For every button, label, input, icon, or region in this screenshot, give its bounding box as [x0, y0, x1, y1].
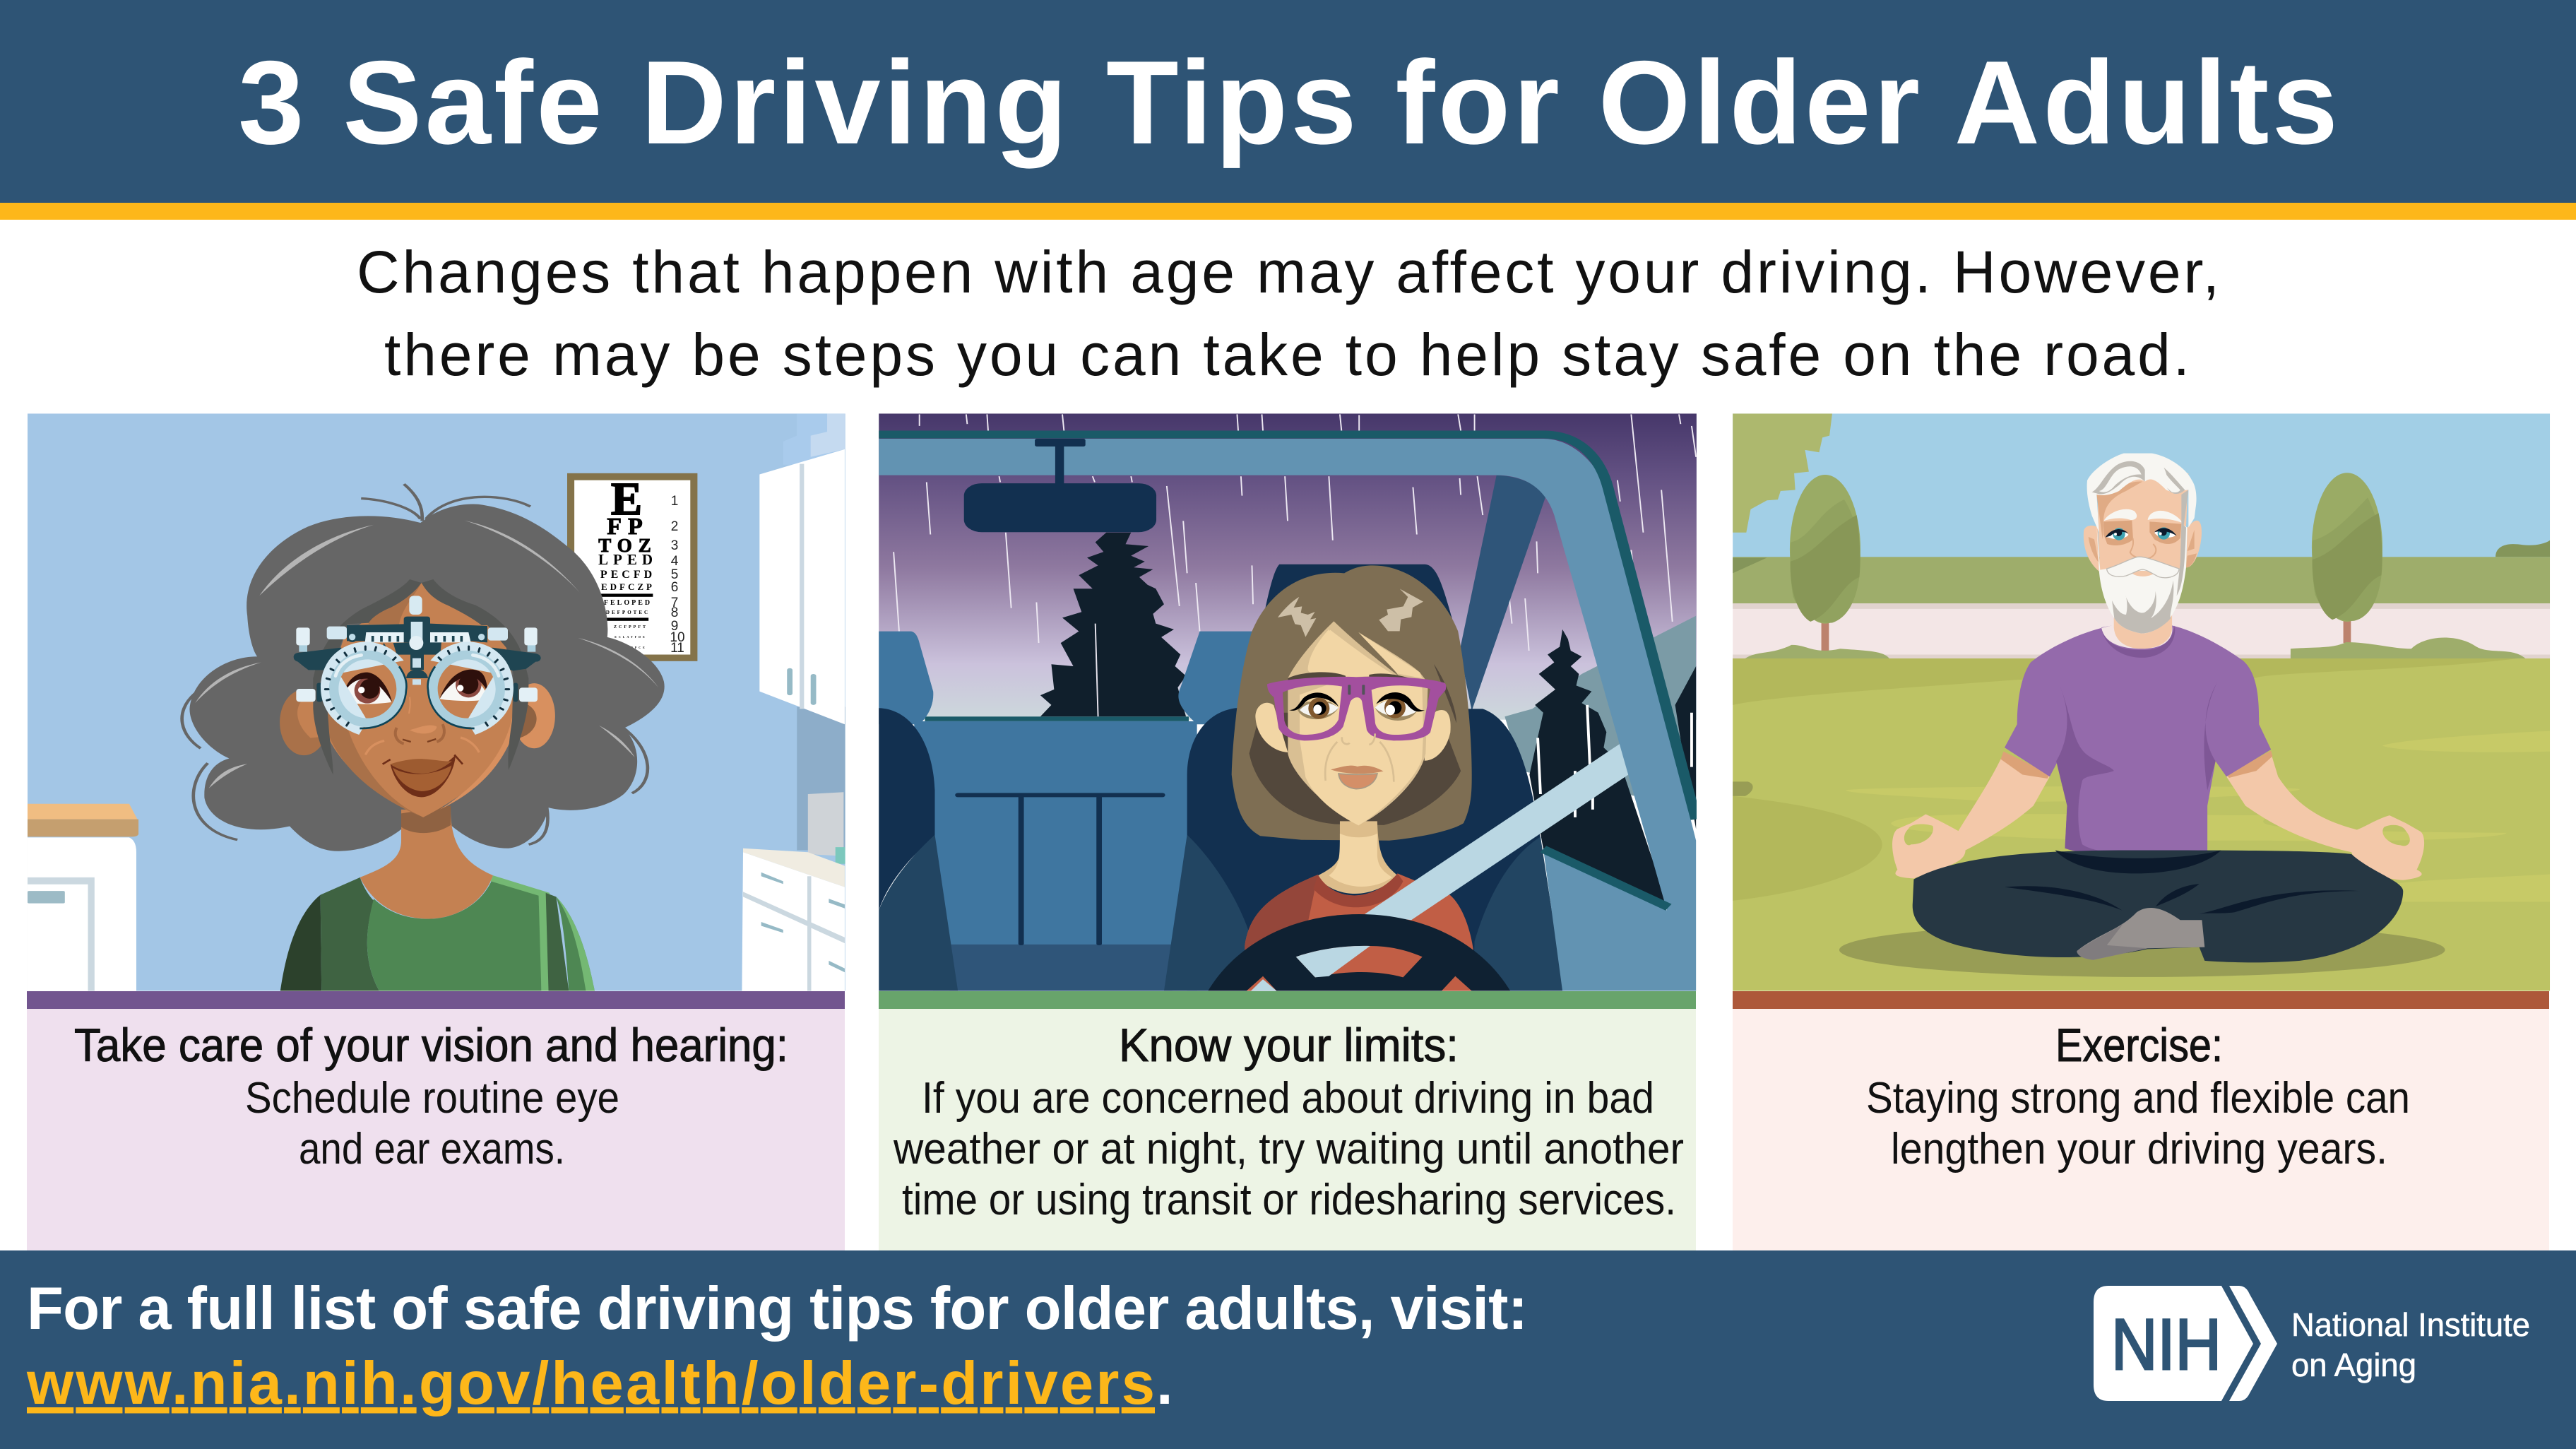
panel: limits text: If you are concerned about driving in bad	[922, 1074, 1654, 1123]
panel: exercise text: lengthen your driving years.	[1891, 1125, 2387, 1173]
lens ring right	[428, 641, 514, 735]
eye right	[2154, 527, 2177, 540]
face	[1288, 621, 1428, 825]
eyebrows	[1288, 672, 1411, 682]
left cabinet	[28, 804, 138, 991]
panel: vision text	[27, 1009, 845, 1250]
footer band	[0, 1250, 2576, 1449]
eye chart letters: ZCFPPFT	[614, 625, 648, 629]
eye chart numbers: 4	[671, 554, 679, 569]
hair	[189, 504, 665, 851]
hair highlights	[1278, 589, 1423, 637]
ears	[1255, 703, 1451, 761]
eye chart letters: PECFD	[600, 569, 655, 581]
forehead	[369, 583, 482, 625]
logo: NIH: NIH	[2111, 1304, 2221, 1385]
eye right	[440, 670, 488, 701]
hair	[1232, 565, 1472, 841]
icon: wall cabinet	[759, 449, 845, 724]
ears	[2084, 521, 2202, 572]
panel: vision text: and ear exams.	[299, 1125, 565, 1173]
a-pillar	[1460, 475, 1546, 711]
eye chart numbers: 3	[671, 538, 678, 553]
face	[2096, 473, 2188, 577]
footer link: .	[1156, 1350, 1173, 1417]
hedge band	[1733, 557, 2550, 604]
rear window edge	[925, 716, 1189, 721]
nose	[365, 697, 479, 755]
panel: exercise text: Staying strong and flexible can	[1866, 1074, 2410, 1123]
corner foliage	[1733, 413, 1832, 533]
header banner	[0, 0, 2576, 220]
shirt	[280, 875, 595, 991]
eye left	[2106, 528, 2128, 540]
logo: institute name: National Institute	[2291, 1306, 2530, 1343]
eye chart numbers: 6	[671, 580, 678, 595]
moustache	[2107, 557, 2179, 578]
pants	[1913, 851, 2403, 962]
eye right	[1375, 692, 1425, 721]
eye chart numbers: 1	[671, 494, 678, 509]
icon: trial lens frame	[294, 596, 541, 735]
panel: vision illustration	[28, 413, 845, 991]
eye chart numbers: 11	[670, 641, 684, 656]
intro text	[357, 239, 2219, 388]
logo: institute name	[2291, 1306, 2530, 1383]
logo: institute name: on Aging	[2291, 1347, 2416, 1383]
panel: vision text: Take care of your vision and hearing:	[74, 1019, 788, 1071]
beard	[2096, 525, 2188, 634]
nose	[1325, 733, 1394, 782]
eye chart numbers: 2	[671, 519, 678, 534]
rain	[894, 414, 1696, 651]
logo: NIH	[2094, 1286, 2277, 1401]
panel: vision text: Schedule routine eye	[245, 1074, 619, 1123]
panel: exercise text: Exercise:	[2055, 1019, 2223, 1071]
eye chart letters: FP	[607, 514, 649, 540]
lens ring left	[321, 641, 406, 735]
grass	[1733, 658, 2550, 991]
intro text: Changes that happen with age may affect your driving. However,	[357, 239, 2219, 305]
eye chart numbers: 10	[670, 630, 685, 645]
eye chart numbers: 8	[671, 605, 678, 620]
color band: vision	[27, 991, 845, 1009]
grass light patches	[1846, 731, 2550, 901]
panel: exercise illustration	[1733, 413, 2550, 991]
neck	[360, 805, 493, 919]
eye chart letters: LFTODPCE	[615, 646, 647, 649]
eye chart letters: DEFPOTEC	[606, 610, 650, 615]
sock	[2077, 908, 2204, 960]
panel: limits illustration	[879, 413, 1697, 991]
rear tree	[1040, 533, 1186, 716]
eye chart letters: E	[611, 473, 642, 525]
hair strands	[182, 484, 648, 844]
footer call to action: For a full list of safe driving tips for older adults, visit:	[27, 1275, 1528, 1342]
icon: eye chart frame	[567, 473, 697, 661]
lips	[1331, 766, 1384, 789]
face	[319, 583, 519, 817]
eye left	[344, 673, 392, 704]
panel: limits text	[879, 1009, 1696, 1250]
panel: limits text: time or using transit or ridesharing services.	[902, 1176, 1676, 1224]
lip	[2132, 571, 2154, 576]
neck	[1317, 821, 1398, 894]
shirt	[1245, 873, 1474, 991]
eye chart numbers	[671, 496, 684, 652]
color band: limits	[879, 991, 1696, 1009]
driver seat	[1164, 564, 1564, 991]
right ear	[520, 683, 555, 749]
window frame	[879, 439, 1696, 991]
hair shadow	[313, 579, 528, 775]
neck	[2114, 608, 2172, 649]
eye chart letters: ECLATFDE	[615, 635, 647, 639]
eye chart numbers: 5	[671, 567, 678, 582]
eyebrows	[2103, 509, 2182, 523]
tree left	[1790, 475, 1860, 653]
nose	[2130, 538, 2156, 559]
tree right	[2312, 473, 2382, 643]
panel: exercise text	[1733, 1009, 2549, 1250]
right counter	[742, 792, 845, 991]
eye chart numbers: 9	[671, 619, 678, 634]
eye chart numbers: 7	[671, 596, 678, 610]
mountain	[1504, 616, 1696, 810]
panel: limits text: weather or at night, try waiting until another	[893, 1125, 1684, 1173]
woman's face details	[294, 579, 541, 797]
icon: purple glasses	[1267, 677, 1446, 740]
intro text: there may be steps you can take to help stay safe on the road.	[384, 321, 2190, 388]
driver's face	[1250, 589, 1456, 825]
left ear	[280, 691, 321, 756]
arms	[1892, 753, 2424, 880]
seat belt	[1365, 742, 1631, 920]
panel: limits text: Know your limits:	[1119, 1019, 1459, 1071]
eye chart letters: EDFCZP	[601, 581, 655, 592]
rear view mirror	[964, 439, 1156, 532]
hair	[2087, 454, 2197, 532]
rear seats	[879, 632, 1263, 991]
eye chart letters: FELOPED	[604, 599, 652, 607]
title: 3 Safe Driving Tips for Older Adults	[238, 36, 2338, 169]
road	[1733, 603, 2550, 659]
steering wheel	[1208, 914, 1510, 991]
shirt	[2005, 625, 2271, 858]
color band: exercise	[1733, 991, 2549, 1009]
eye chart letters: LPED	[598, 551, 658, 568]
shrubs	[1745, 637, 2525, 658]
shadow	[1839, 923, 2445, 977]
hair strands	[1250, 664, 1456, 812]
eye chart letters: TOZ	[598, 535, 658, 556]
eye chart letters	[598, 473, 685, 656]
eye shading	[2103, 521, 2181, 545]
side trees	[1529, 629, 1696, 903]
hair highlights	[195, 521, 658, 788]
man's head	[2084, 454, 2202, 634]
mouth	[383, 755, 463, 797]
eye left	[1289, 692, 1339, 719]
footer link: www.nia.nih.gov/health/older-drivers	[26, 1350, 1155, 1417]
